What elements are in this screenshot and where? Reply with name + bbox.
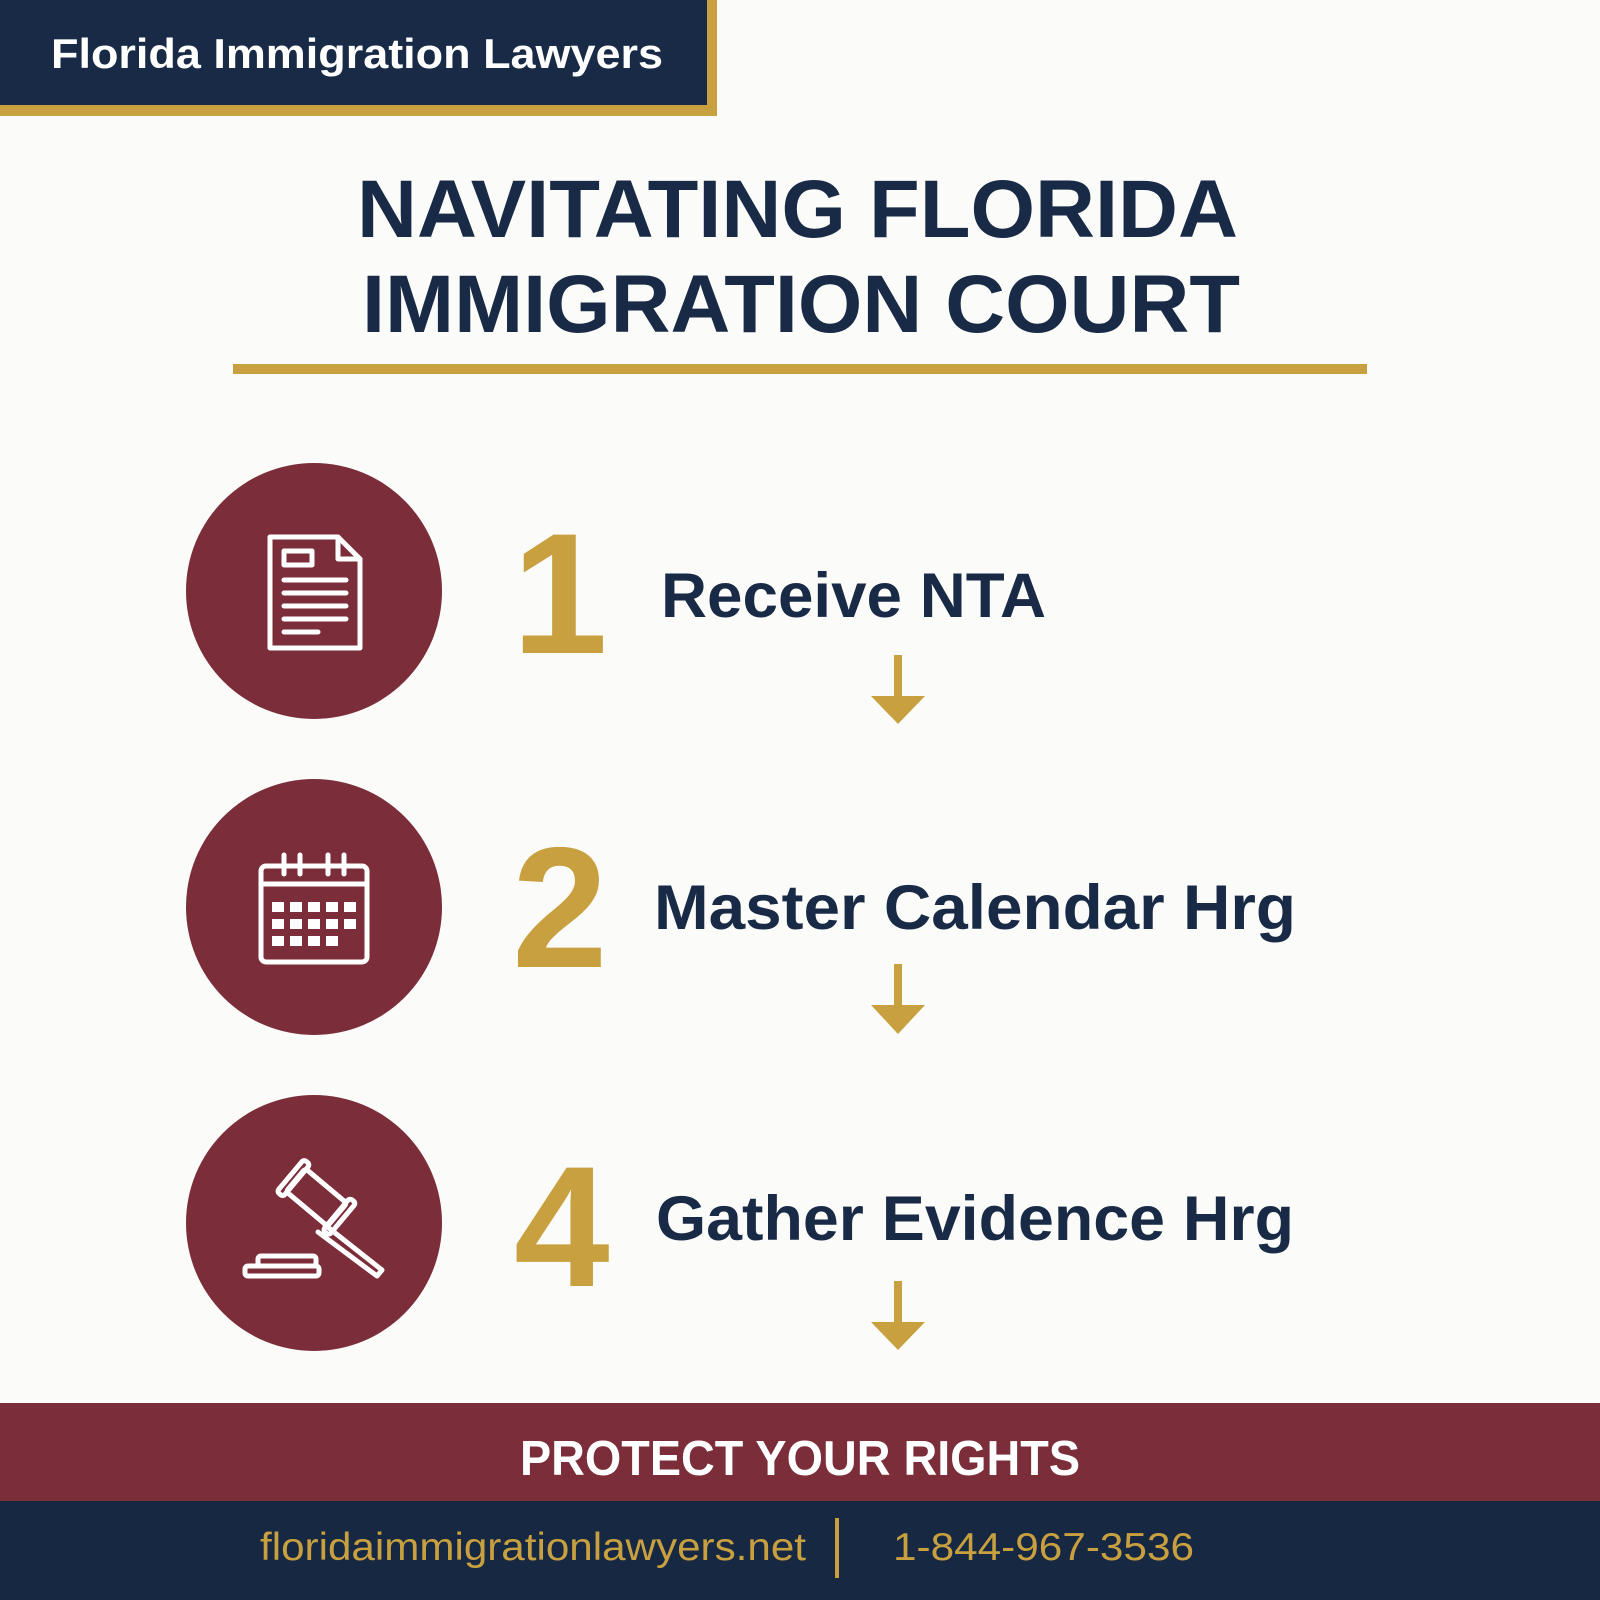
banner: protect your rights: [0, 1403, 1600, 1501]
label: Master Calendar Hrg: [654, 873, 1296, 943]
title: [357, 164, 1240, 350]
arrow: [871, 1281, 925, 1350]
number 1: 1: [512, 498, 608, 690]
header badge: Florida Immigration Lawyers: [51, 30, 663, 77]
footer contact: 1-844-967-3536: [893, 1526, 1194, 1569]
title: NAVITATING FLORIDA: [357, 164, 1238, 255]
step 1: [186, 463, 1046, 724]
number 4: 4: [514, 1131, 610, 1323]
header badge: [0, 0, 717, 116]
footer contact: [0, 1501, 1600, 1600]
step 4: [186, 1095, 1294, 1351]
step 2: [186, 779, 1296, 1035]
arrow: [871, 655, 925, 724]
number 2: 2: [512, 812, 608, 1004]
banner: protect your rights: PROTECT YOUR RIGHTS: [520, 1432, 1080, 1486]
icon: document: [186, 463, 442, 719]
title: IMMIGRATION COURT: [362, 259, 1240, 350]
title underline: [233, 364, 1367, 374]
icon: gavel: [186, 1095, 442, 1351]
label: Receive NTA: [661, 561, 1046, 631]
footer contact: floridaimmigrationlawyers.net: [260, 1526, 806, 1569]
arrow: [871, 964, 925, 1034]
label: Gather Evidence Hrg: [656, 1184, 1294, 1254]
icon: calendar: [186, 779, 442, 1035]
